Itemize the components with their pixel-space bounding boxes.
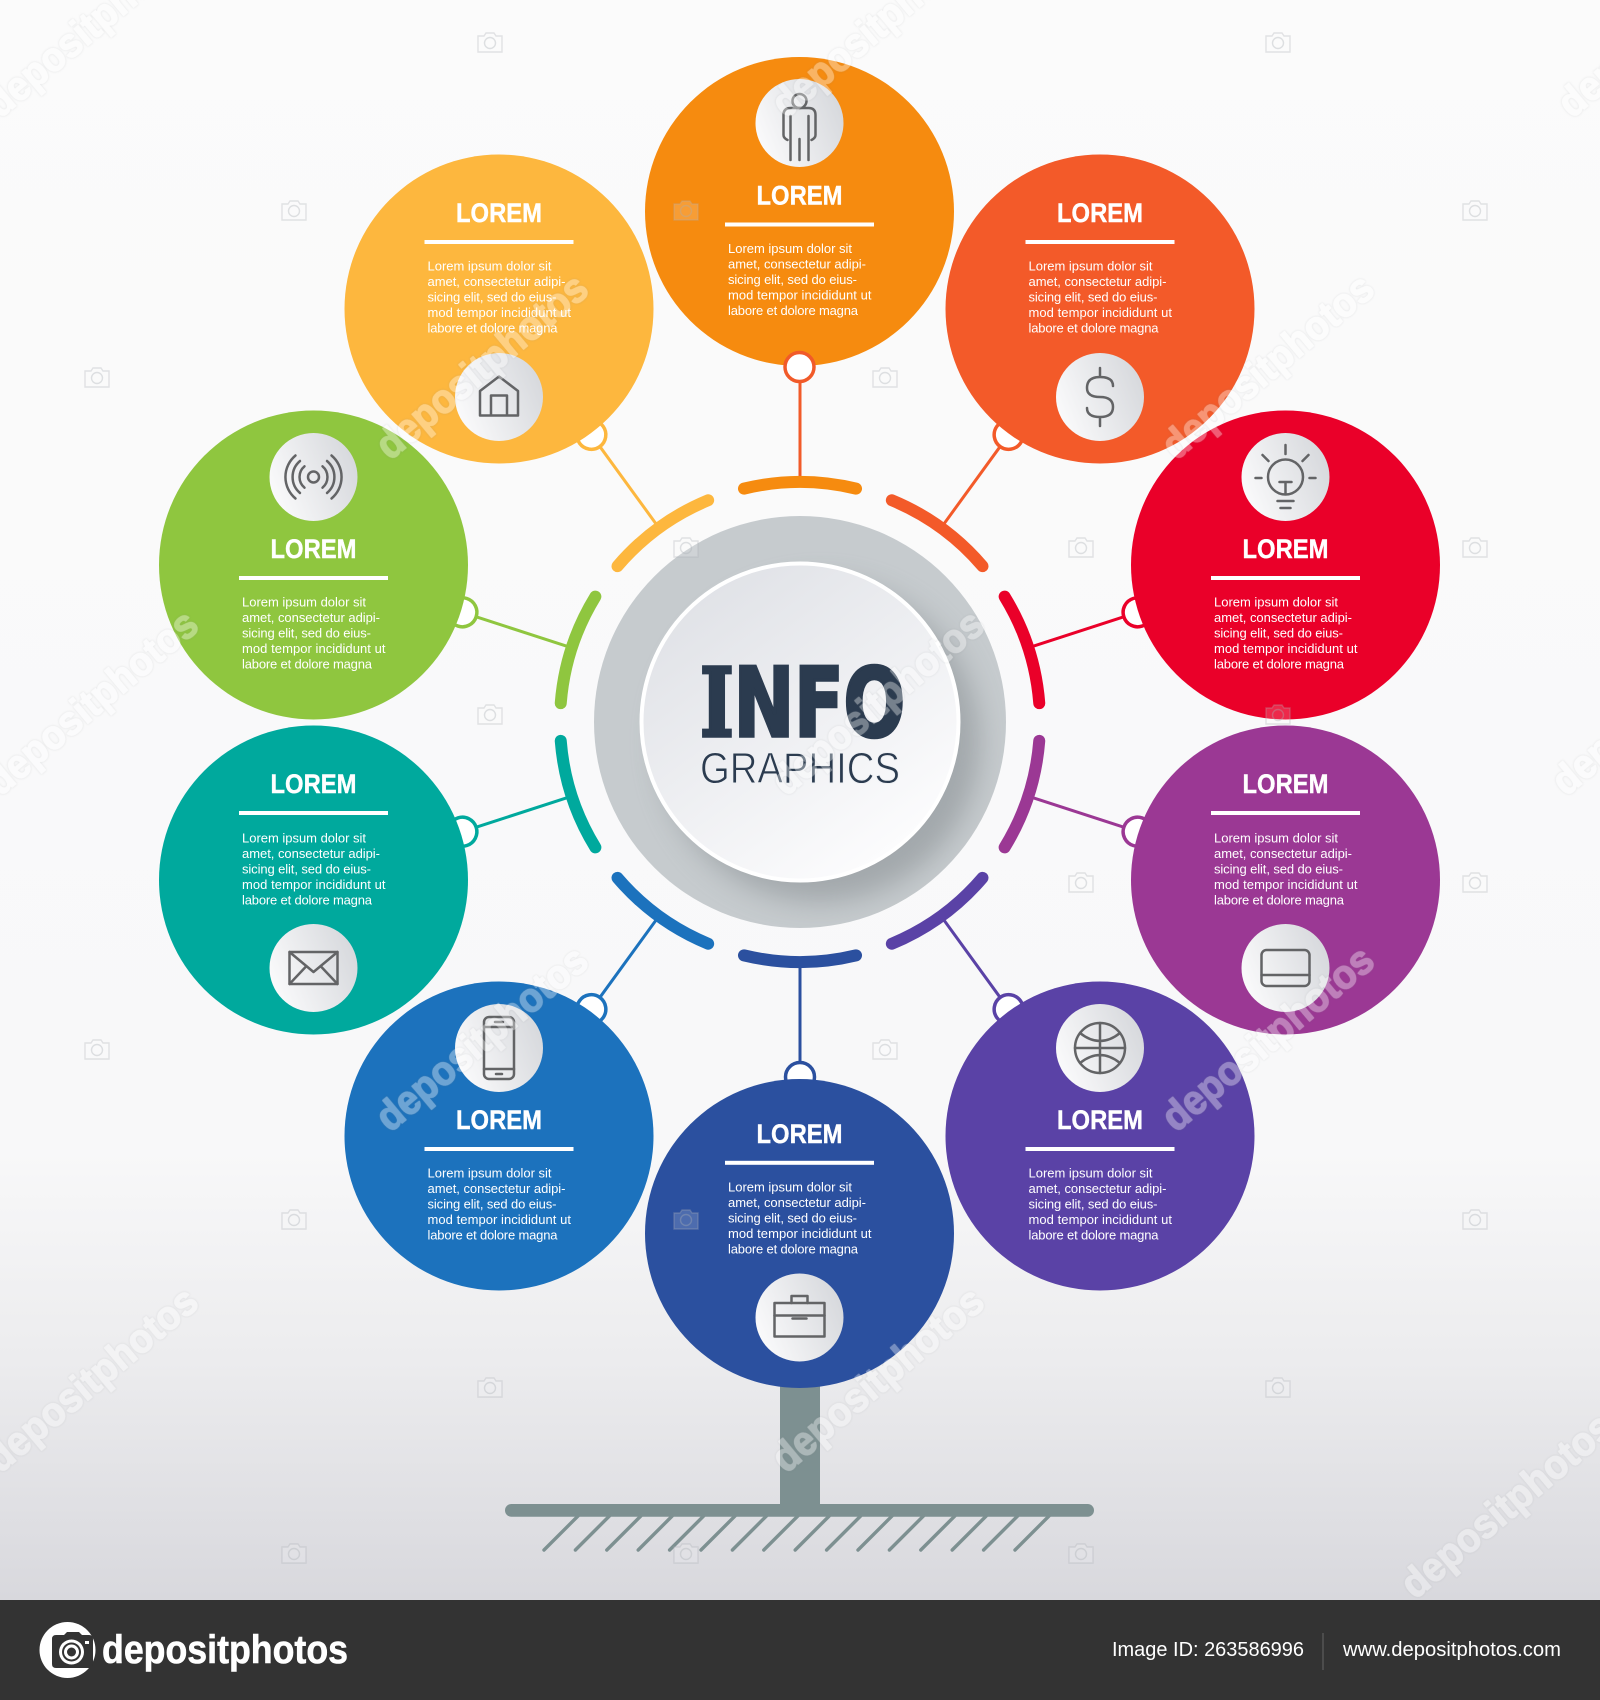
body text: sicing elit, sed do eius-	[1028, 1196, 1158, 1212]
website: www.depositphotos.com	[1342, 1639, 1561, 1661]
body text: sicing elit, sed do eius-	[1028, 290, 1158, 304]
icon: envelope	[270, 924, 358, 1012]
body text: amet, consectetur adipi-	[1214, 846, 1352, 861]
body text: labore et dolore magna	[1028, 320, 1159, 336]
panel: red	[1131, 410, 1440, 720]
body text: mod tempor incididunt ut	[1214, 877, 1358, 892]
body text	[1214, 594, 1358, 672]
connector: dark blue	[744, 955, 856, 1092]
body text: Lorem ipsum dolor sit	[728, 1180, 852, 1194]
body text	[1214, 830, 1358, 908]
body text: Lorem ipsum dolor sit	[428, 258, 552, 274]
body text: mod tempor incididunt ut	[1214, 641, 1358, 656]
body text: Lorem ipsum dolor sit	[728, 241, 852, 256]
body text: mod tempor incididunt ut	[428, 305, 571, 320]
body text: mod tempor incididunt ut	[242, 641, 386, 656]
body text: amet, consectetur adipi-	[728, 1195, 866, 1210]
body text	[728, 1180, 872, 1256]
icon: dollar	[1056, 353, 1144, 441]
body text: amet, consectetur adipi-	[428, 1181, 566, 1196]
body text	[728, 241, 872, 318]
body text: labore et dolore magna	[242, 892, 373, 908]
body text: Lorem ipsum dolor sit	[1028, 1166, 1153, 1180]
panel: red-orange	[946, 154, 1254, 464]
watermark: depositphotos	[366, 264, 596, 468]
body text: mod tempor incididunt ut	[428, 1212, 571, 1227]
image id: Image ID: 263586996	[1112, 1639, 1304, 1661]
body text	[242, 594, 386, 672]
segmented ring and connectors	[431, 382, 1169, 1092]
body text: labore et dolore magna	[1214, 892, 1345, 908]
body text	[1028, 258, 1172, 336]
panel: yellow	[344, 154, 654, 464]
heading: LOREM	[756, 180, 842, 210]
heading: LOREM	[1242, 534, 1328, 564]
heading: LOREM	[270, 534, 356, 564]
body text: labore et dolore magna	[428, 320, 558, 336]
body text: amet, consectetur adipi-	[242, 846, 380, 861]
body text	[242, 830, 386, 908]
body text: mod tempor incididunt ut	[1028, 1212, 1172, 1227]
body text: mod tempor incididunt ut	[242, 877, 386, 892]
panel: green	[159, 410, 468, 720]
icon: light bulb	[1242, 433, 1330, 521]
body text: labore et dolore magna	[1214, 656, 1345, 672]
body text: Lorem ipsum dolor sit	[1214, 830, 1338, 846]
connector: green	[431, 555, 595, 703]
icon: house	[455, 353, 543, 441]
watermark: depositphotos	[366, 936, 596, 1140]
subtitle: GRAPHICS: GRAPHICS	[700, 744, 900, 793]
connector: red-orange	[892, 390, 1063, 566]
connector: teal	[431, 741, 595, 889]
body text: amet, consectetur adipi-	[728, 256, 866, 272]
icon: footer logo camera	[40, 1622, 96, 1678]
body text: mod tempor incididunt ut	[728, 1226, 872, 1241]
body text: labore et dolore magna	[242, 656, 373, 672]
heading: LOREM	[456, 1105, 542, 1135]
connector: orange	[744, 382, 856, 489]
panel: blue	[344, 982, 654, 1290]
panel: teal	[159, 726, 468, 1034]
panel: orange	[645, 57, 954, 366]
body text: amet, consectetur adipi-	[1214, 610, 1352, 625]
body text: mod tempor incididunt ut	[728, 288, 872, 302]
body text: sicing elit, sed do eius-	[242, 626, 371, 640]
heading: LOREM	[456, 198, 542, 228]
orange connector ring	[785, 352, 814, 382]
heading: LOREM	[756, 1119, 842, 1149]
icon: briefcase	[756, 1274, 844, 1362]
heading: LOREM	[270, 769, 356, 799]
heading: LOREM	[1057, 1105, 1143, 1135]
body text: sicing elit, sed do eius-	[428, 1196, 556, 1212]
body text: sicing elit, sed do eius-	[1214, 862, 1343, 876]
watermark: depositphotos	[1152, 264, 1382, 468]
footer logo text: depositphotos	[102, 1628, 348, 1672]
body text: amet, consectetur adipi-	[1028, 1181, 1166, 1196]
body text: sicing elit, sed do eius-	[728, 1210, 857, 1226]
body text: amet, consectetur adipi-	[428, 274, 566, 289]
watermark: depositphotos	[762, 1277, 992, 1481]
body text: mod tempor incididunt ut	[1028, 305, 1172, 320]
icon: person	[756, 79, 844, 167]
body text: labore et dolore magna	[728, 303, 859, 318]
title: INFO: INFO	[700, 648, 905, 759]
body text: Lorem ipsum dolor sit	[428, 1166, 552, 1180]
watermark: depositphotos	[762, 600, 992, 804]
body text: amet, consectetur adipi-	[1028, 274, 1166, 289]
central disc	[594, 516, 1006, 928]
body text: labore et dolore magna	[428, 1228, 558, 1242]
body text: sicing elit, sed do eius-	[1214, 626, 1343, 640]
watermark: depositphotos	[1152, 936, 1382, 1140]
tree stand with ground hatching	[505, 1380, 1094, 1550]
icon: smartphone	[455, 1004, 543, 1092]
heading: LOREM	[1242, 769, 1328, 799]
body text: labore et dolore magna	[1028, 1228, 1159, 1242]
body text: sicing elit, sed do eius-	[242, 862, 371, 876]
panel: violet	[946, 982, 1254, 1290]
footer bar	[0, 1600, 1600, 1700]
body text	[428, 258, 571, 336]
body text: Lorem ipsum dolor sit	[1028, 258, 1153, 274]
body text: amet, consectetur adipi-	[242, 610, 380, 625]
body text: Lorem ipsum dolor sit	[242, 830, 366, 846]
panel: purple	[1131, 726, 1440, 1034]
body text: labore et dolore magna	[728, 1242, 859, 1256]
heading: LOREM	[1057, 198, 1143, 228]
icon: tablet	[1242, 924, 1330, 1012]
body text: sicing elit, sed do eius-	[428, 290, 556, 304]
body text	[428, 1166, 571, 1242]
icon: basketball	[1056, 1004, 1144, 1092]
icon: signal	[270, 433, 358, 521]
body text: Lorem ipsum dolor sit	[242, 594, 366, 610]
body text: sicing elit, sed do eius-	[728, 272, 857, 287]
connector: violet	[892, 878, 1063, 1054]
body text	[1028, 1166, 1172, 1242]
panel: dark blue	[645, 1079, 954, 1388]
connector: red	[1005, 555, 1169, 703]
connector: blue	[537, 878, 708, 1054]
connector: purple	[1005, 741, 1169, 889]
body text: Lorem ipsum dolor sit	[1214, 594, 1338, 610]
connector: yellow	[537, 390, 708, 566]
